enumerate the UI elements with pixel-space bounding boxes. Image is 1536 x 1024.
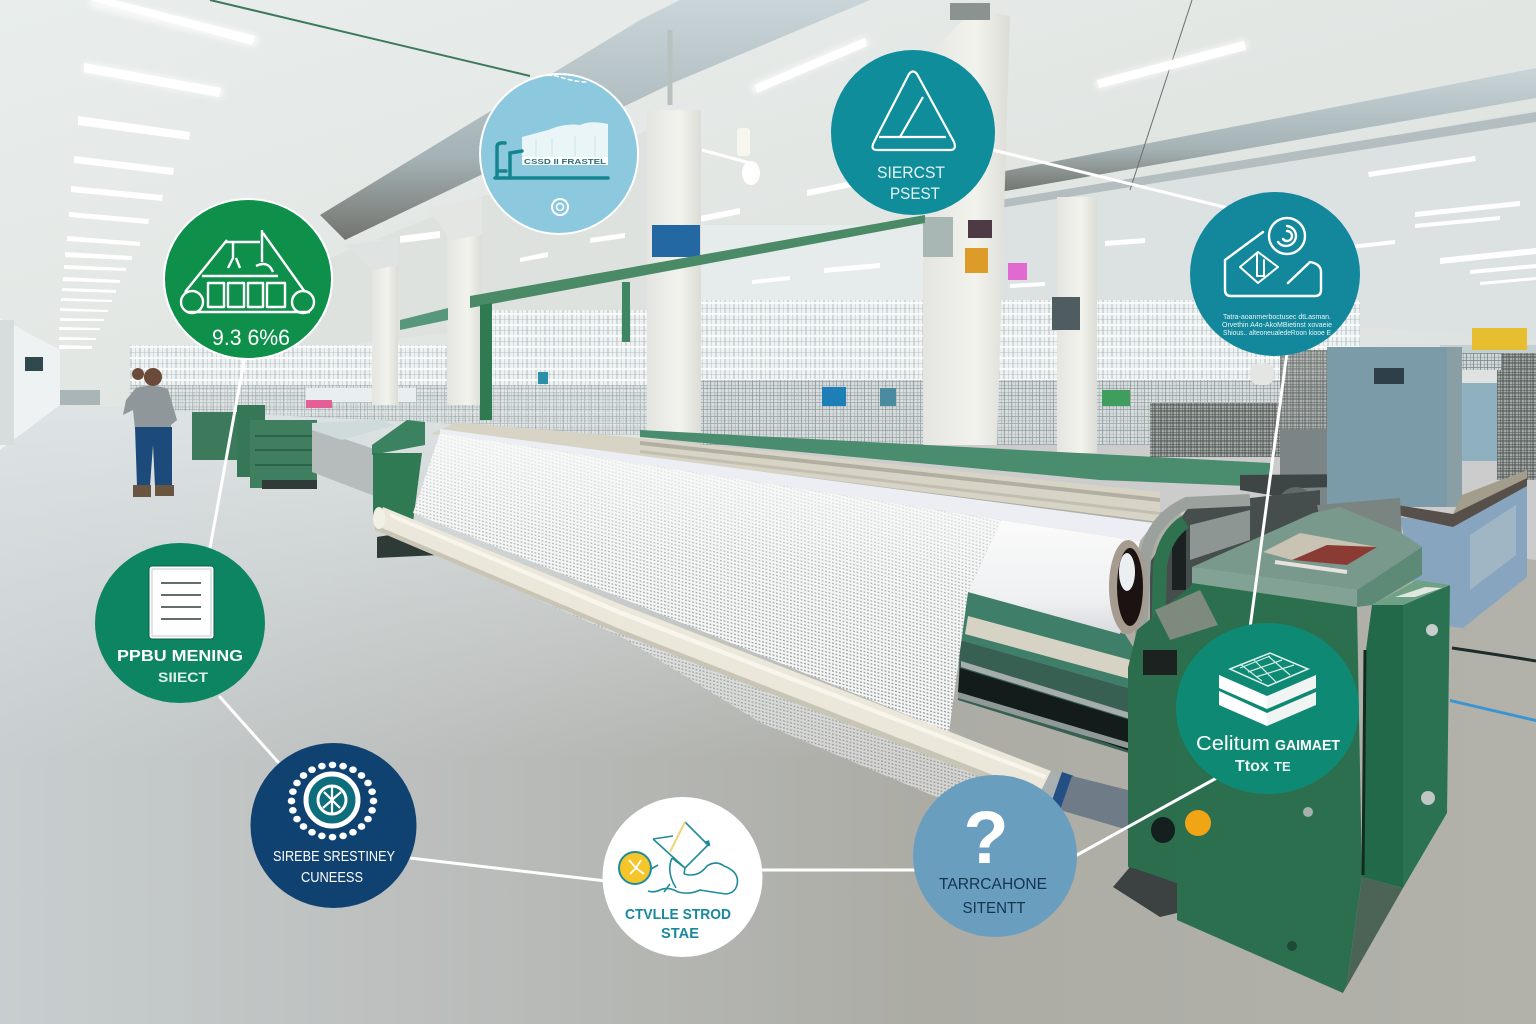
badge heading: TARRCAHONE [939, 876, 1047, 893]
badge subheading: CUNEESS [301, 870, 363, 886]
ceiling duct left [320, 0, 870, 240]
badge figure: 9.3 6%6 [212, 325, 290, 350]
icon: document [149, 566, 214, 639]
badge subheading: SIIECT [158, 670, 209, 685]
background: floor [0, 405, 1536, 1024]
green rail behind rollers [640, 430, 1270, 487]
badge heading: CTVLLE STROD [625, 906, 731, 923]
icon: layered stack [1219, 653, 1316, 726]
badge subheading: SITENTT [962, 900, 1026, 917]
node: machine illustration badge [480, 74, 638, 234]
badge subheading: TE [1274, 759, 1291, 774]
lower machine rollers [958, 592, 1135, 755]
icon: package with roll [1225, 218, 1321, 296]
small caption: Tatra-aoanmerboctusec dtLasman. [1223, 312, 1331, 321]
yellow button [1185, 810, 1211, 836]
green overhead beam [400, 215, 925, 420]
ceiling lights [59, 0, 1536, 349]
back rollers [430, 422, 1160, 541]
node: question badge [913, 775, 1077, 937]
small caption: Shious.. alteoneualedeRoon kiooe E [1223, 328, 1331, 337]
icon: machine unit [495, 75, 608, 215]
badge heading: PPBU MENING [117, 648, 243, 665]
small caption [1222, 312, 1332, 337]
node: roll and diamond badge [1190, 192, 1360, 356]
connector lines [210, 150, 1287, 881]
main green machine body [1113, 498, 1450, 993]
far green machines [192, 405, 440, 558]
node: layered textile badge [1176, 623, 1359, 794]
icon: kite, sun and wave [619, 822, 737, 894]
background: factory ceiling [0, 0, 1536, 440]
icon: machine unit: CSSD II FRASTEL [524, 159, 607, 166]
front roller bar [373, 507, 1128, 830]
icon: dotted ring [288, 762, 377, 840]
woven mesh fabric sheet [413, 433, 1001, 732]
node: conveyor badge [164, 199, 332, 359]
columns [345, 3, 1097, 453]
roller frame mechanism [1109, 430, 1376, 650]
background: racks of machinery [130, 300, 1536, 480]
icon: warning triangle [873, 72, 955, 150]
column signs [923, 217, 953, 257]
badge subheading: PSEST [890, 184, 940, 203]
badge heading: GAIMAET [1275, 738, 1340, 754]
icon: question mark: ? [963, 796, 1009, 879]
lower hanging mesh [433, 553, 1000, 799]
small caption: Orvethin A4o-AkoMBietinst xovaeie [1222, 320, 1332, 329]
icon: conveyor machine [181, 230, 314, 313]
badge heading: SIREBE SRESTINEY [273, 849, 395, 865]
badge heading: SIERCST [877, 163, 945, 182]
badge subheading: Ttox [1235, 758, 1269, 775]
person [123, 368, 177, 497]
booklet on machine [1263, 533, 1377, 565]
badge heading: Celitum [1196, 733, 1270, 755]
node: document badge [95, 543, 265, 703]
blue-grey machine right [1327, 328, 1527, 628]
large fabric roll [968, 520, 1140, 634]
node: cloud and kite badge [602, 797, 762, 957]
badge subheading: STAE [661, 925, 699, 942]
column band [652, 225, 700, 257]
node: fibre ring badge [250, 743, 416, 908]
left wall [0, 318, 100, 450]
ceiling duct right [1000, 68, 1536, 192]
node: triangle badge [831, 50, 995, 215]
